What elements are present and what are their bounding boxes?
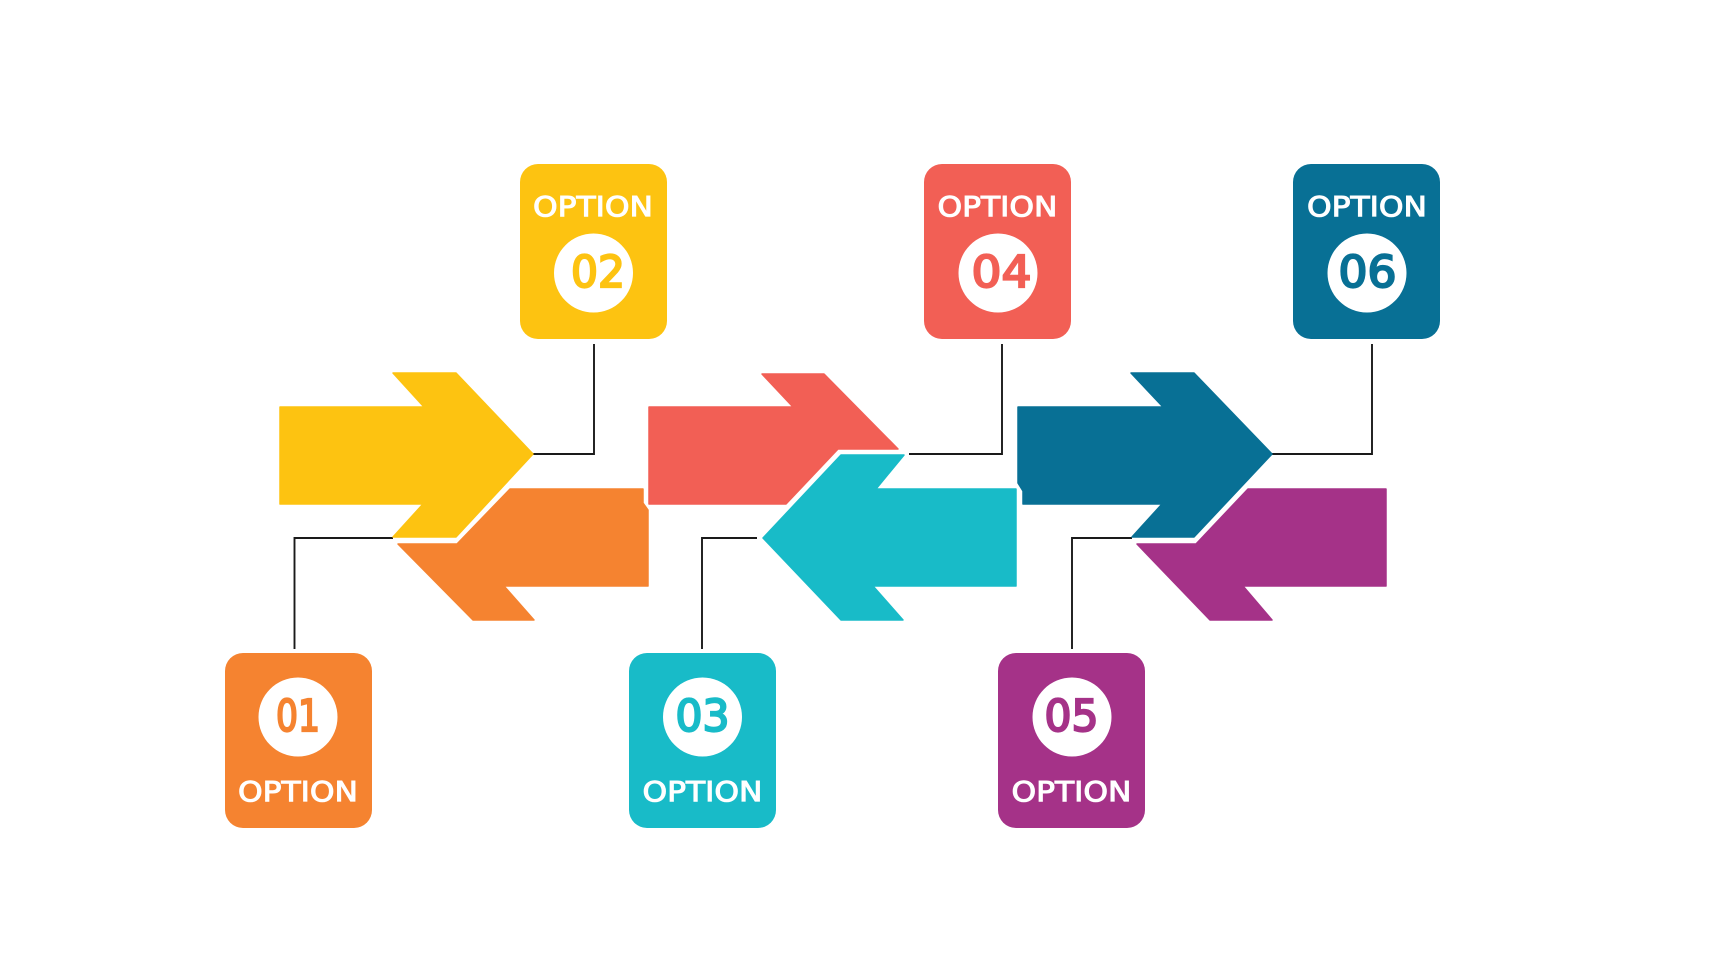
number 06: 06 [1338,247,1396,298]
label: option 02: OPTION [533,190,653,223]
card: option 06 [1293,164,1440,339]
number 01: 01 [276,691,320,742]
arrow: blue step 06 [1018,373,1272,537]
connector: step 03 [702,538,757,649]
number 03: 03 [676,691,730,742]
connector: step 05 [1072,538,1132,649]
label: option 03: OPTION [642,775,762,808]
card: option 03 [629,653,776,828]
number 05: 05 [1044,691,1098,742]
label: option 01: OPTION [238,775,358,808]
arrow: orange step 01 [398,489,648,620]
card: option 05 [998,653,1145,828]
label: option 05: OPTION [1012,775,1132,808]
card: option 02 [520,164,667,339]
card: option 04 [924,164,1071,339]
connector: step 04 [909,344,1002,454]
label: option 06: OPTION [1307,190,1427,223]
arrow: yellow step 02 [280,373,533,537]
label: option 04: OPTION [938,190,1058,223]
connector: step 01 [294,538,393,649]
connector: step 02 [533,344,594,454]
number 02: 02 [571,247,625,298]
connector: step 06 [1272,344,1372,454]
arrow: teal step 03 [763,455,1016,620]
arrow: coral step 04 [649,374,898,504]
arrow: purple step 05 [1137,489,1386,620]
number 04: 04 [972,247,1032,298]
card: option 01 [225,653,372,828]
